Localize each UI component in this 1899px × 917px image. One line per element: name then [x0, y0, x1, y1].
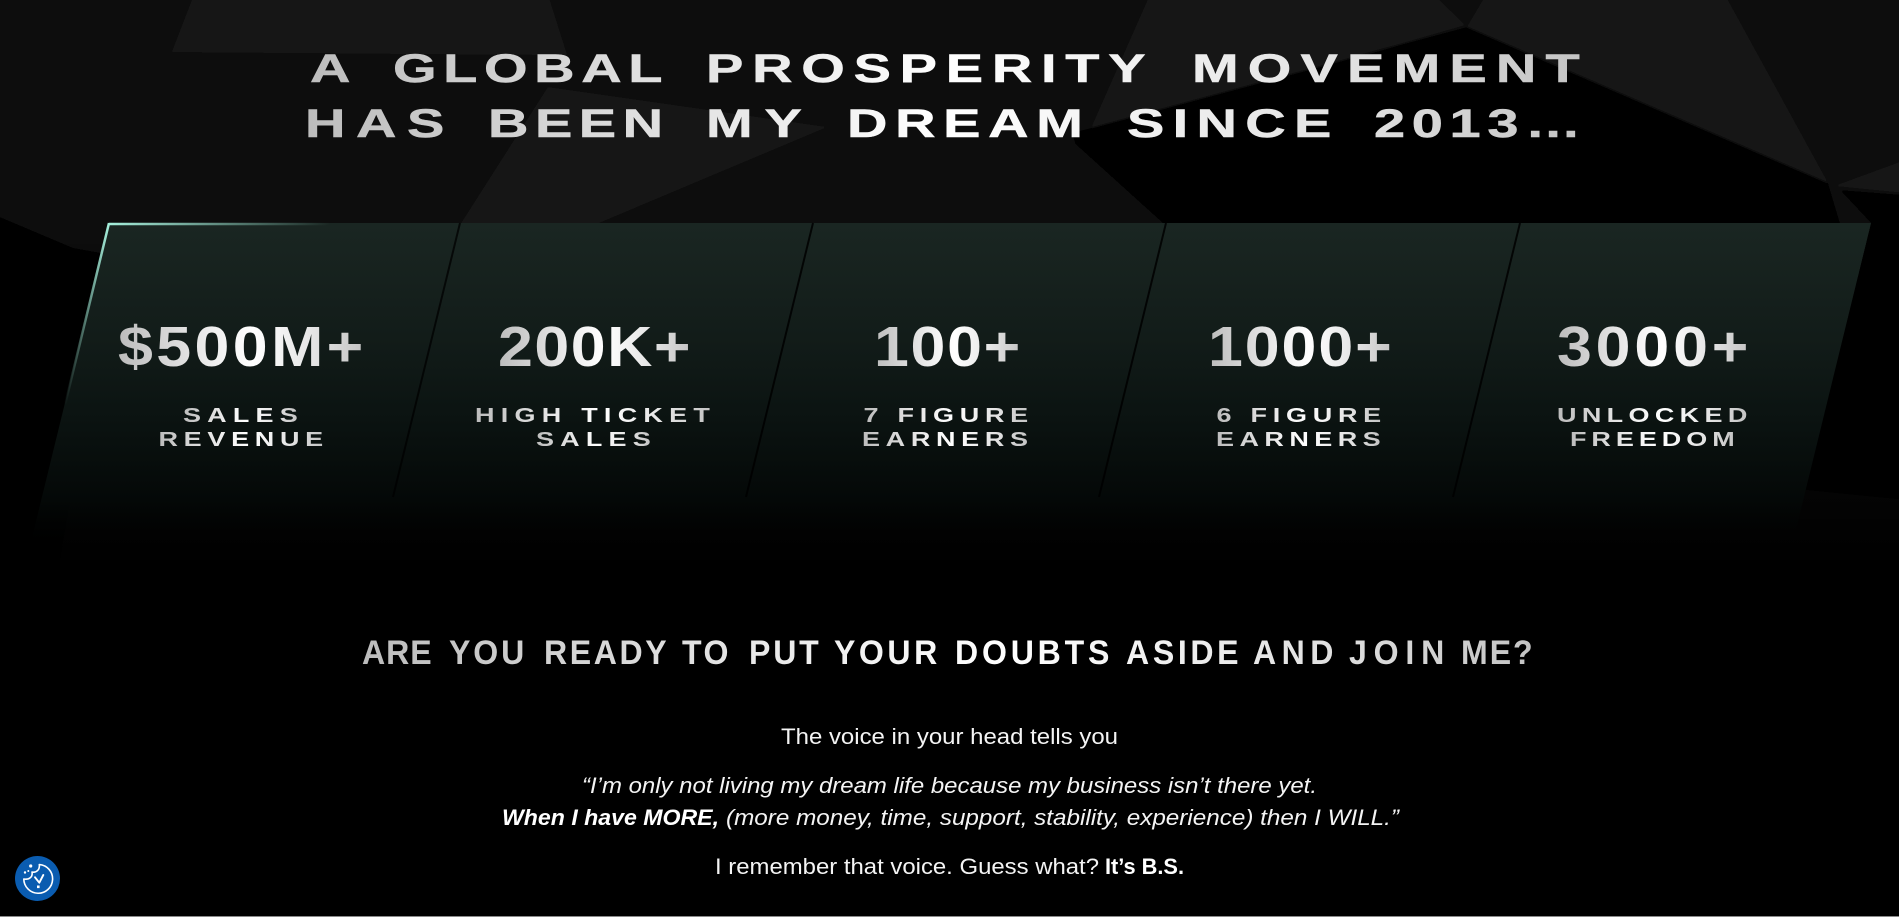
- number: $500M+: [118, 315, 363, 378]
- heading: call to action: DOUBTS: [955, 634, 1109, 672]
- label: [1557, 404, 1747, 451]
- label: SALES: [183, 404, 298, 427]
- panel: stats band: [29, 223, 1871, 550]
- intro line: The voice in your head tells you: [781, 724, 1118, 749]
- label: SALES: [536, 428, 651, 451]
- number: 100+: [874, 315, 1020, 378]
- title line 2: [305, 102, 1581, 146]
- heading: call to action: YOU: [449, 634, 524, 672]
- label: EARNERS: [1216, 428, 1381, 451]
- label: UNLOCKED: [1557, 404, 1747, 427]
- heading: call to action: ASIDE: [1126, 634, 1239, 672]
- label: EARNERS: [862, 428, 1028, 451]
- label: HIGH TICKET: [475, 404, 710, 427]
- number: 200K+: [498, 315, 691, 378]
- text block: inner voice: [502, 724, 1401, 879]
- title line 2: MY: [706, 102, 802, 146]
- title line 1: A: [310, 47, 350, 91]
- heading: call to action: JOIN: [1349, 634, 1444, 672]
- stat: high ticket sales: [475, 315, 710, 451]
- label: [158, 404, 323, 451]
- label: 7 FIGURE: [864, 404, 1028, 427]
- heading: call to action: YOUR: [834, 634, 937, 672]
- number: 1000+: [1208, 315, 1392, 378]
- heading: call to action: TO: [682, 634, 728, 672]
- label: 6 FIGURE: [1216, 404, 1381, 427]
- quote line 2: [502, 805, 1401, 830]
- icon: cookie consent badge: [15, 856, 60, 901]
- title line 1: GLOBAL: [393, 47, 662, 91]
- label: FREEDOM: [1570, 428, 1735, 451]
- heading: call to action: ME?: [1461, 634, 1533, 672]
- heading: call to action: READY: [544, 634, 667, 672]
- stat: 7 figure earners: [862, 315, 1028, 451]
- title line 2: SINCE: [1127, 102, 1331, 146]
- stat: sales revenue: [118, 315, 363, 451]
- stat: unlocked freedom: [1557, 315, 1748, 451]
- label: [862, 404, 1028, 451]
- heading: call to action: AND: [1253, 634, 1333, 672]
- quote line 1: “I’m only not living my dream life because my business isn’t there yet.: [582, 773, 1317, 798]
- stat: 6 figure earners: [1208, 315, 1392, 451]
- heading: call to action: ARE: [362, 634, 432, 672]
- title line 2: DREAM: [847, 102, 1083, 146]
- quote line 2: (more money, time, support, stability, experience) then I WILL.”: [726, 805, 1401, 830]
- title line 2: HAS: [305, 102, 444, 146]
- title line 1: PROSPERITY: [706, 47, 1146, 91]
- closing line: It’s B.S.: [1105, 854, 1184, 879]
- title line 2: BEEN: [488, 102, 663, 146]
- heading: call to action: [362, 634, 1533, 672]
- band background: [29, 223, 1871, 550]
- quote line 2: When I have MORE,: [502, 805, 719, 830]
- title: [305, 47, 1581, 146]
- label: [475, 404, 710, 451]
- top-left glow edge: [65, 223, 330, 405]
- heading: call to action: PUT: [749, 634, 819, 672]
- title line 1: [310, 47, 1580, 91]
- title line 2: 2013…: [1374, 102, 1581, 146]
- label: REVENUE: [158, 428, 323, 451]
- label: [1216, 404, 1381, 451]
- closing line: I remember that voice. Guess what?: [715, 854, 1099, 879]
- number: 3000+: [1557, 315, 1748, 378]
- title line 1: MOVEMENT: [1192, 47, 1580, 91]
